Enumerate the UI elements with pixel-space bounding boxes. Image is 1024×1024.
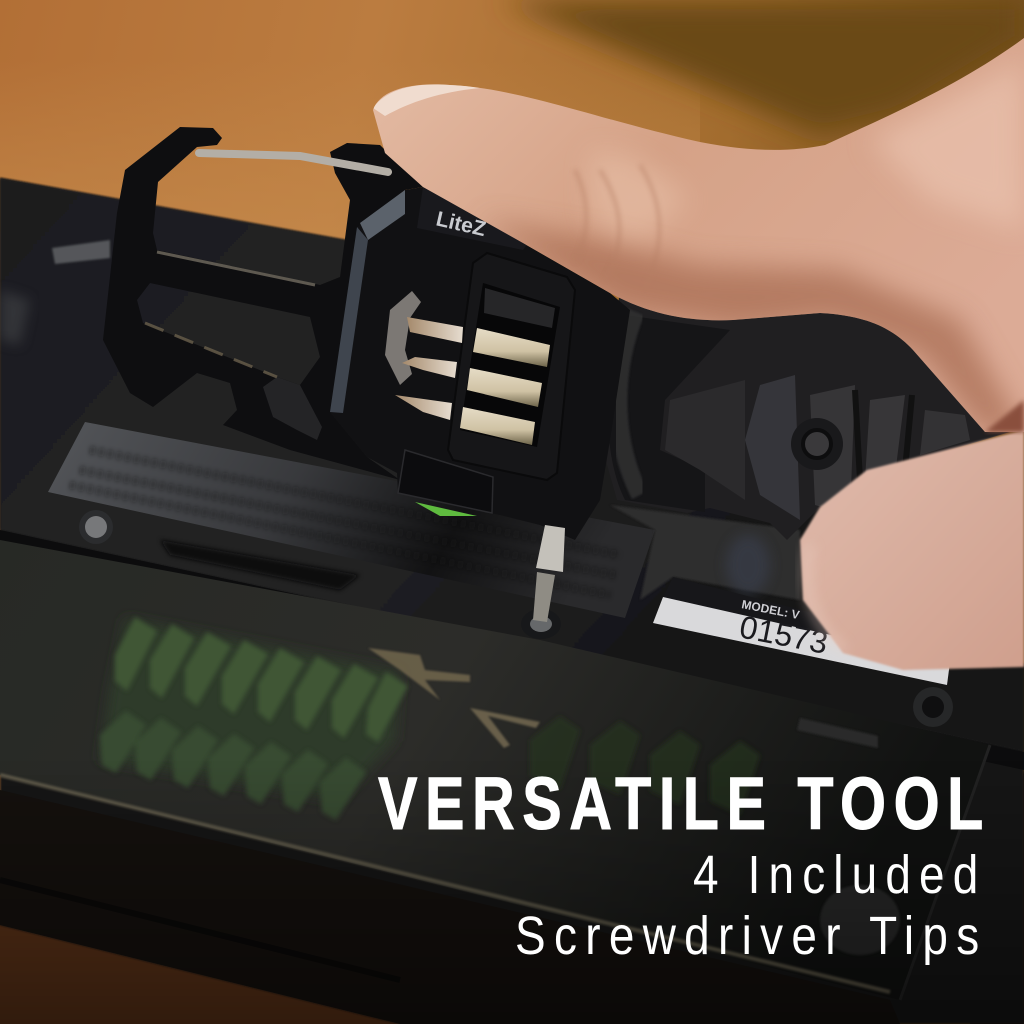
bottle opener notch bbox=[263, 377, 322, 440]
serial number sticker: MODEL: V bbox=[740, 597, 801, 622]
carabiner wire gate bbox=[199, 153, 388, 172]
tool: carabiner body bbox=[103, 127, 423, 480]
thumb shading bbox=[373, 60, 1024, 435]
plate bevels bbox=[360, 190, 405, 240]
tool: main plate with bits bbox=[330, 187, 630, 622]
tool: main plate with bits: LiteZ bbox=[434, 207, 488, 241]
hand: thumb and fingers bbox=[373, 38, 1024, 670]
caption bbox=[378, 763, 991, 966]
bit row 3 bbox=[395, 395, 452, 420]
reflection of screw and tool in glass bbox=[368, 648, 900, 955]
green indicator bbox=[415, 502, 477, 516]
tool: handle grip bbox=[600, 290, 1010, 540]
bit holder frame bbox=[448, 253, 575, 480]
lower finger bbox=[800, 430, 1024, 670]
logo tab bbox=[417, 187, 530, 250]
serial number sticker bbox=[653, 577, 950, 685]
serial number sticker: 01573 bbox=[737, 609, 831, 661]
subheading: 4 Included bbox=[693, 845, 986, 905]
bit row 1 bbox=[407, 317, 463, 343]
bit row 2 bbox=[402, 357, 457, 378]
subheading: Screwdriver Tips bbox=[515, 906, 987, 966]
screws on box bbox=[52, 240, 953, 727]
dark reflection on box under label bbox=[160, 540, 360, 590]
dark gradient behind caption bbox=[0, 760, 1024, 1024]
thumb bbox=[373, 38, 1024, 432]
reflected green tool pattern in glass bbox=[100, 617, 760, 820]
lower block bbox=[398, 450, 493, 513]
heading: VERSATILE TOOL bbox=[378, 763, 991, 846]
oval holder bbox=[385, 291, 421, 385]
active screwdriver bit bbox=[536, 525, 565, 572]
translucent label on box bbox=[0, 290, 655, 618]
subheading bbox=[515, 845, 987, 966]
lighter box area under the handle bbox=[610, 505, 800, 600]
teeth highlights bbox=[145, 323, 277, 377]
